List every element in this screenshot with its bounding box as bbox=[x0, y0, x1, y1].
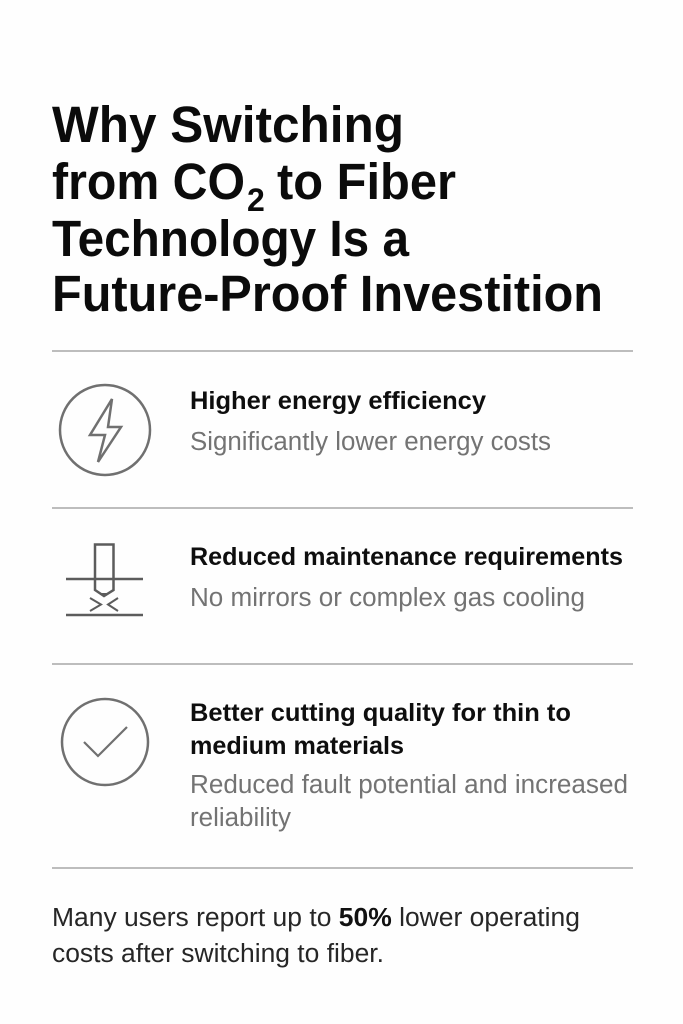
heading: cutting quality bbox=[190, 699, 571, 760]
icon: lightning bolt in circle bbox=[60, 385, 150, 475]
footer note: Many users report up to 50% lower operating bbox=[52, 904, 580, 932]
footer note: costs after switching to fiber. bbox=[52, 940, 384, 968]
title: from CO bbox=[52, 153, 245, 210]
title bbox=[52, 96, 603, 322]
icon: laser cutting head bbox=[66, 544, 143, 615]
text: fault potential: reliability bbox=[190, 804, 291, 832]
text: fault potential bbox=[190, 771, 628, 832]
panel: cutting quality bbox=[62, 699, 628, 832]
text: mirrors and gas cooling: No mirrors or complex gas cooling bbox=[190, 584, 585, 612]
title: Why Switching bbox=[52, 96, 404, 153]
icon: check mark in circle bbox=[62, 699, 148, 785]
title: to Fiber bbox=[277, 153, 456, 210]
title: Future-Proof Investition bbox=[52, 265, 603, 322]
heading: cutting quality: Better cutting quality for thin to bbox=[190, 699, 571, 727]
text: fault potential: Reduced fault potential and increased bbox=[190, 771, 628, 799]
title: Technology Is a bbox=[52, 210, 410, 267]
panel: maintenance bbox=[66, 543, 623, 615]
text: energy costs: Significantly lower energy costs bbox=[190, 428, 551, 456]
heading: energy efficiency: Higher energy efficiency bbox=[190, 387, 486, 415]
heading: cutting quality: medium materials bbox=[190, 732, 404, 760]
title: 2 bbox=[247, 182, 265, 218]
heading: maintenance: Reduced maintenance requirements bbox=[190, 543, 623, 571]
footer note bbox=[52, 904, 580, 968]
panel: energy efficiency bbox=[60, 385, 551, 475]
